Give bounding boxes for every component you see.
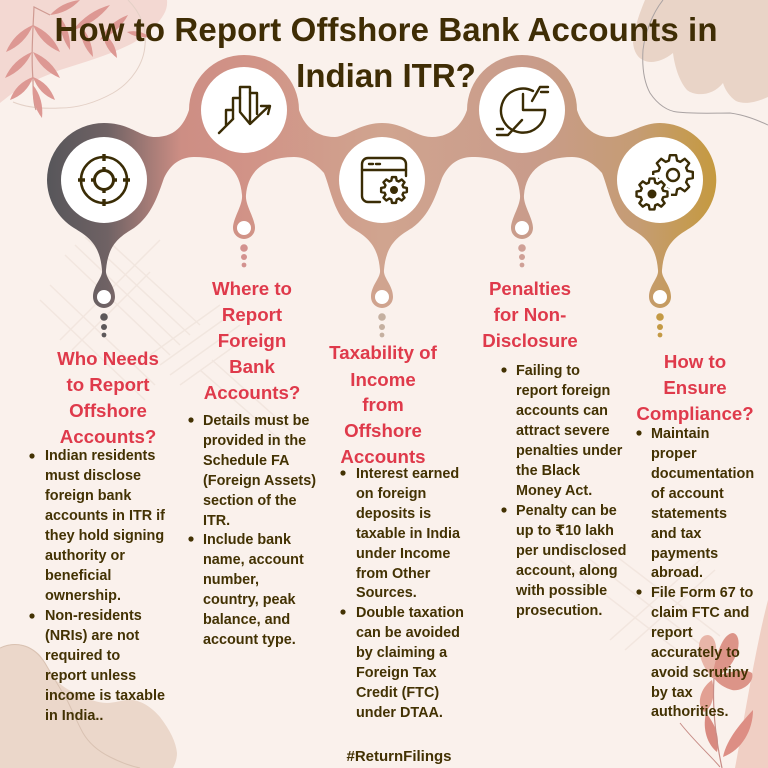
dots: step 1 bbox=[100, 313, 108, 337]
bullets: who needs to report: (NRIs) are not bbox=[45, 628, 140, 644]
heading: where to report: Accounts? bbox=[204, 382, 300, 403]
bullets: where to report: section of the bbox=[203, 493, 297, 509]
bullets: taxability: under Income bbox=[356, 546, 450, 562]
bullets: penalties: accounts can bbox=[516, 403, 608, 419]
bullets: who needs to report: report unless bbox=[45, 668, 136, 684]
bullets: who needs to report: required to bbox=[45, 648, 120, 664]
bullets: who needs to report: foreign bank bbox=[45, 488, 132, 504]
bullets: taxability: can be avoided bbox=[356, 625, 460, 641]
decoration: faint hatching bbox=[40, 229, 720, 660]
bullets: who needs to report: in India.. bbox=[45, 708, 103, 724]
heading: compliance: Ensure bbox=[663, 377, 727, 398]
bullets: penalties: per undisclosed bbox=[516, 543, 626, 559]
bullets: where to report: balance, and bbox=[203, 612, 290, 628]
bullets: penalties bbox=[501, 363, 626, 619]
bullets: who needs to report: Non-residents bbox=[45, 608, 142, 624]
decoration: top-right outline bbox=[643, 0, 768, 125]
bullets: compliance: by tax bbox=[651, 685, 693, 701]
bullets: taxability: by claiming a bbox=[356, 645, 448, 661]
bullets: penalties: Money Act. bbox=[516, 483, 592, 499]
bullets: penalties: penalties under bbox=[516, 443, 623, 459]
heading: where to report: Foreign bbox=[218, 330, 286, 351]
bullets: where to report: number, bbox=[203, 572, 259, 588]
bullets: taxability: from Other bbox=[356, 566, 431, 582]
heading: where to report: Where to bbox=[212, 278, 292, 299]
heading: penalties: Penalties bbox=[489, 278, 571, 299]
bullets: where to report bbox=[188, 413, 316, 648]
dots: step 4 bbox=[518, 244, 526, 267]
dots: step 2 bbox=[240, 244, 248, 267]
bullets: where to report: Schedule FA bbox=[203, 453, 290, 469]
bullets: who needs to report bbox=[29, 448, 165, 724]
bullets: where to report: provided in the bbox=[203, 433, 306, 449]
bullets: compliance: payments bbox=[651, 546, 718, 562]
heading: penalties: for Non- bbox=[494, 304, 566, 325]
bullets: where to report: Details must be bbox=[203, 413, 309, 429]
bullets: where to report: (Foreign Assets) bbox=[203, 473, 316, 489]
bullets: compliance: abroad. bbox=[651, 565, 703, 581]
bullets: taxability: taxable in India bbox=[356, 526, 461, 542]
heading: who needs to report: Accounts? bbox=[60, 426, 156, 447]
bullets: taxability: Double taxation bbox=[356, 605, 464, 621]
title: Indian ITR? bbox=[296, 57, 476, 94]
bullets: taxability bbox=[340, 466, 464, 721]
title: How to Report Offshore Bank Accounts in bbox=[54, 11, 718, 48]
bullets: penalties: up to ₹10 lakh bbox=[516, 523, 614, 539]
footer hashtag: #ReturnFilings bbox=[346, 748, 452, 765]
icon: pie chart bbox=[497, 87, 548, 135]
bullets: compliance: statements bbox=[651, 506, 727, 522]
bullets: taxability: under DTAA. bbox=[356, 705, 443, 721]
heading: taxability: Taxability of bbox=[329, 342, 438, 363]
bullets: compliance bbox=[636, 426, 754, 720]
bullets: penalties: with possible bbox=[515, 583, 607, 599]
bullets: compliance: avoid scrutiny bbox=[651, 665, 749, 681]
bullets: penalties: prosecution. bbox=[516, 603, 602, 619]
bullets: where to report: country, peak bbox=[203, 592, 296, 608]
bullets: who needs to report: must disclose bbox=[45, 468, 141, 484]
bullets: penalties: account, along bbox=[516, 563, 618, 579]
heading: compliance: How to bbox=[664, 351, 726, 372]
panel: penalties bbox=[482, 278, 626, 619]
heading: who needs to report: to Report bbox=[66, 374, 150, 395]
bullets: compliance: Maintain bbox=[651, 426, 709, 442]
decoration: top-left blob bbox=[0, 0, 167, 103]
bullets: who needs to report: income is taxable bbox=[45, 688, 165, 704]
bullets: who needs to report: accounts in ITR if bbox=[45, 508, 165, 524]
timeline ribbon bbox=[47, 55, 716, 308]
heading: where to report: Report bbox=[222, 304, 282, 325]
bullets: who needs to report: they hold signing bbox=[45, 528, 164, 544]
decoration: bottom-right wedge bbox=[735, 600, 768, 768]
bullets: where to report: account type. bbox=[203, 632, 296, 648]
bullets: penalties: the Black bbox=[516, 463, 581, 479]
heading: taxability: from bbox=[362, 394, 404, 415]
icon: gears bbox=[637, 155, 693, 209]
panel: where to report bbox=[188, 278, 316, 648]
bullets: penalties: report foreign bbox=[516, 383, 610, 399]
bullets: taxability: Interest earned bbox=[356, 466, 459, 482]
heading: where to report: Bank bbox=[229, 356, 275, 377]
bullets: who needs to report: authority or bbox=[45, 548, 125, 564]
decoration: bottom-left blob bbox=[0, 644, 177, 768]
bullets: penalties: Failing to bbox=[516, 363, 580, 379]
decoration: leaf sprig bbox=[5, 0, 150, 118]
dots: step 3 bbox=[378, 313, 386, 337]
heading: who needs to report: Who Needs bbox=[57, 348, 159, 369]
bullets: compliance: proper bbox=[651, 446, 697, 462]
heading: taxability: Accounts bbox=[340, 446, 426, 467]
bullets: compliance: File Form 67 to bbox=[651, 585, 754, 601]
dots: step 5 bbox=[656, 313, 664, 337]
bullets: compliance: of account bbox=[651, 486, 724, 502]
panel: taxability bbox=[329, 342, 464, 721]
white discs bbox=[61, 67, 703, 304]
bullets: compliance: documentation bbox=[651, 466, 754, 482]
bullets: taxability: Foreign Tax bbox=[356, 665, 436, 681]
decoration: bottom-left outline bbox=[0, 645, 140, 768]
bullets: compliance: claim FTC and bbox=[651, 605, 749, 621]
bullets: who needs to report: Indian residents bbox=[45, 448, 155, 464]
bullets: taxability: Credit (FTC) bbox=[356, 685, 439, 701]
bullets: penalties: attract severe bbox=[516, 423, 610, 439]
bullets: taxability: on foreign bbox=[356, 486, 426, 502]
bullets: taxability: deposits is bbox=[356, 506, 431, 522]
heading: penalties: Disclosure bbox=[482, 330, 578, 351]
bullets: where to report: ITR. bbox=[203, 513, 230, 529]
bullets: compliance: authorities. bbox=[651, 704, 729, 720]
icon: browser window with gear bbox=[362, 158, 407, 203]
icon: target bbox=[78, 154, 130, 206]
decoration: top-right blob bbox=[633, 0, 768, 103]
heading: compliance: Compliance? bbox=[636, 403, 754, 424]
bullets: taxability: Sources. bbox=[356, 585, 417, 601]
bullets: who needs to report: beneficial bbox=[45, 568, 111, 584]
heading: taxability: Offshore bbox=[344, 420, 422, 441]
bullets: where to report: name, account bbox=[203, 552, 304, 568]
title bbox=[54, 11, 718, 94]
decoration: flower bottom right bbox=[680, 633, 753, 768]
bullets: compliance: report bbox=[651, 625, 693, 641]
bullets: who needs to report: ownership. bbox=[45, 588, 121, 604]
panel: who needs to report bbox=[29, 348, 165, 724]
bullets: penalties: Penalty can be bbox=[516, 503, 617, 519]
heading: taxability: Income bbox=[350, 369, 416, 390]
bullets: where to report: Include bank bbox=[203, 532, 292, 548]
bullets: compliance: and tax bbox=[651, 526, 701, 542]
decoration: top-left outline bbox=[13, 0, 145, 108]
panel: how to ensure compliance bbox=[636, 351, 754, 720]
bullets: compliance: accurately to bbox=[651, 645, 740, 661]
icon: bar chart with arrow bbox=[219, 87, 270, 133]
heading: who needs to report: Offshore bbox=[69, 400, 147, 421]
